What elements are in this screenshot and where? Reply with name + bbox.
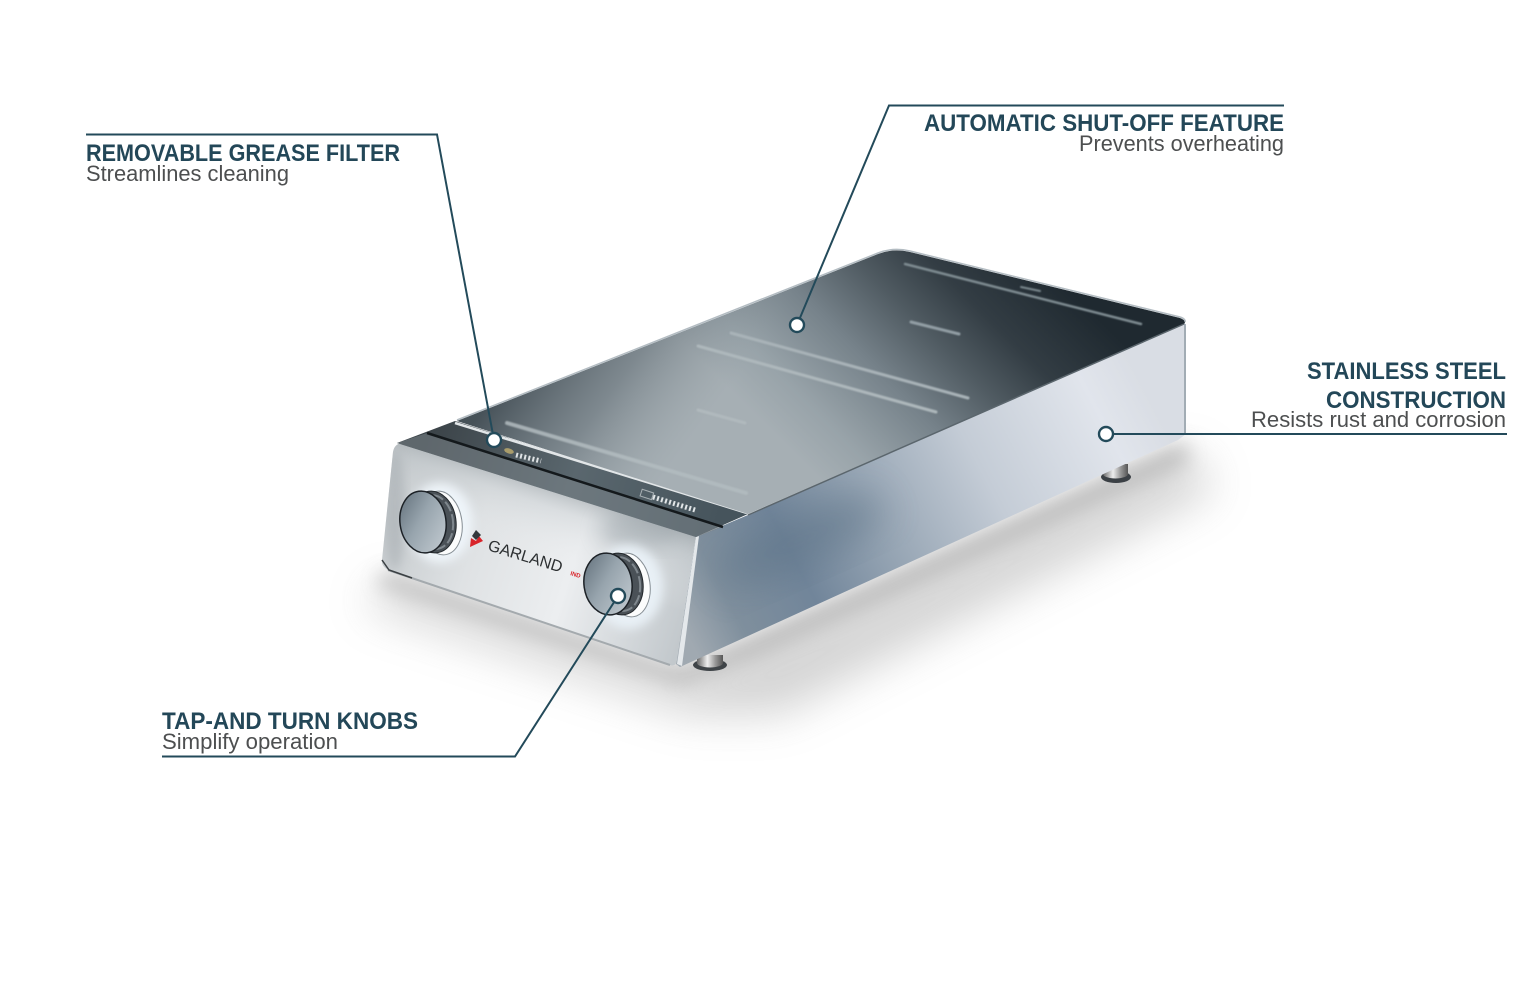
left knob	[396, 483, 473, 563]
heading: TAP-AND TURN KNOBS	[162, 708, 418, 735]
infographic canvas	[86, 104, 1507, 758]
heading line 2: CONSTRUCTION	[1326, 387, 1506, 414]
display ticks	[503, 447, 695, 510]
heading: REMOVABLE GREASE FILTER	[86, 140, 400, 167]
brand logo	[470, 530, 582, 580]
leader line	[86, 134, 494, 440]
feet	[693, 464, 1131, 671]
marker	[487, 433, 501, 447]
heading line 1: STAINLESS STEEL	[1307, 358, 1506, 385]
description: Streamlines cleaning	[86, 161, 289, 186]
heading: AUTOMATIC SHUT-OFF FEATURE	[924, 110, 1284, 137]
side panel	[676, 322, 1186, 667]
callout: removable grease filter	[86, 134, 501, 447]
marker	[1099, 427, 1113, 441]
floor shadow	[362, 440, 1215, 715]
leader line	[162, 596, 618, 756]
product image: induction cooktop	[362, 249, 1215, 715]
callout: automatic shut-off feature	[790, 106, 1284, 332]
glass cooktop surface	[457, 249, 1185, 515]
callout: tap-and turn knobs	[162, 589, 625, 756]
brand logo: GARLAND	[486, 538, 564, 576]
control strip	[397, 421, 748, 537]
brand logo: IND	[569, 571, 582, 580]
leader line	[1106, 433, 1507, 435]
description: Resists rust and corrosion	[1251, 407, 1506, 432]
leader line	[797, 106, 1284, 325]
front panel	[382, 444, 696, 665]
description: Simplify operation	[162, 729, 338, 754]
marker	[611, 589, 625, 603]
marker	[790, 318, 804, 332]
right knob	[580, 545, 663, 629]
cooktop zone markings	[507, 264, 1141, 493]
description: Prevents overheating	[1079, 131, 1284, 156]
callout: stainless steel construction	[1099, 358, 1507, 441]
